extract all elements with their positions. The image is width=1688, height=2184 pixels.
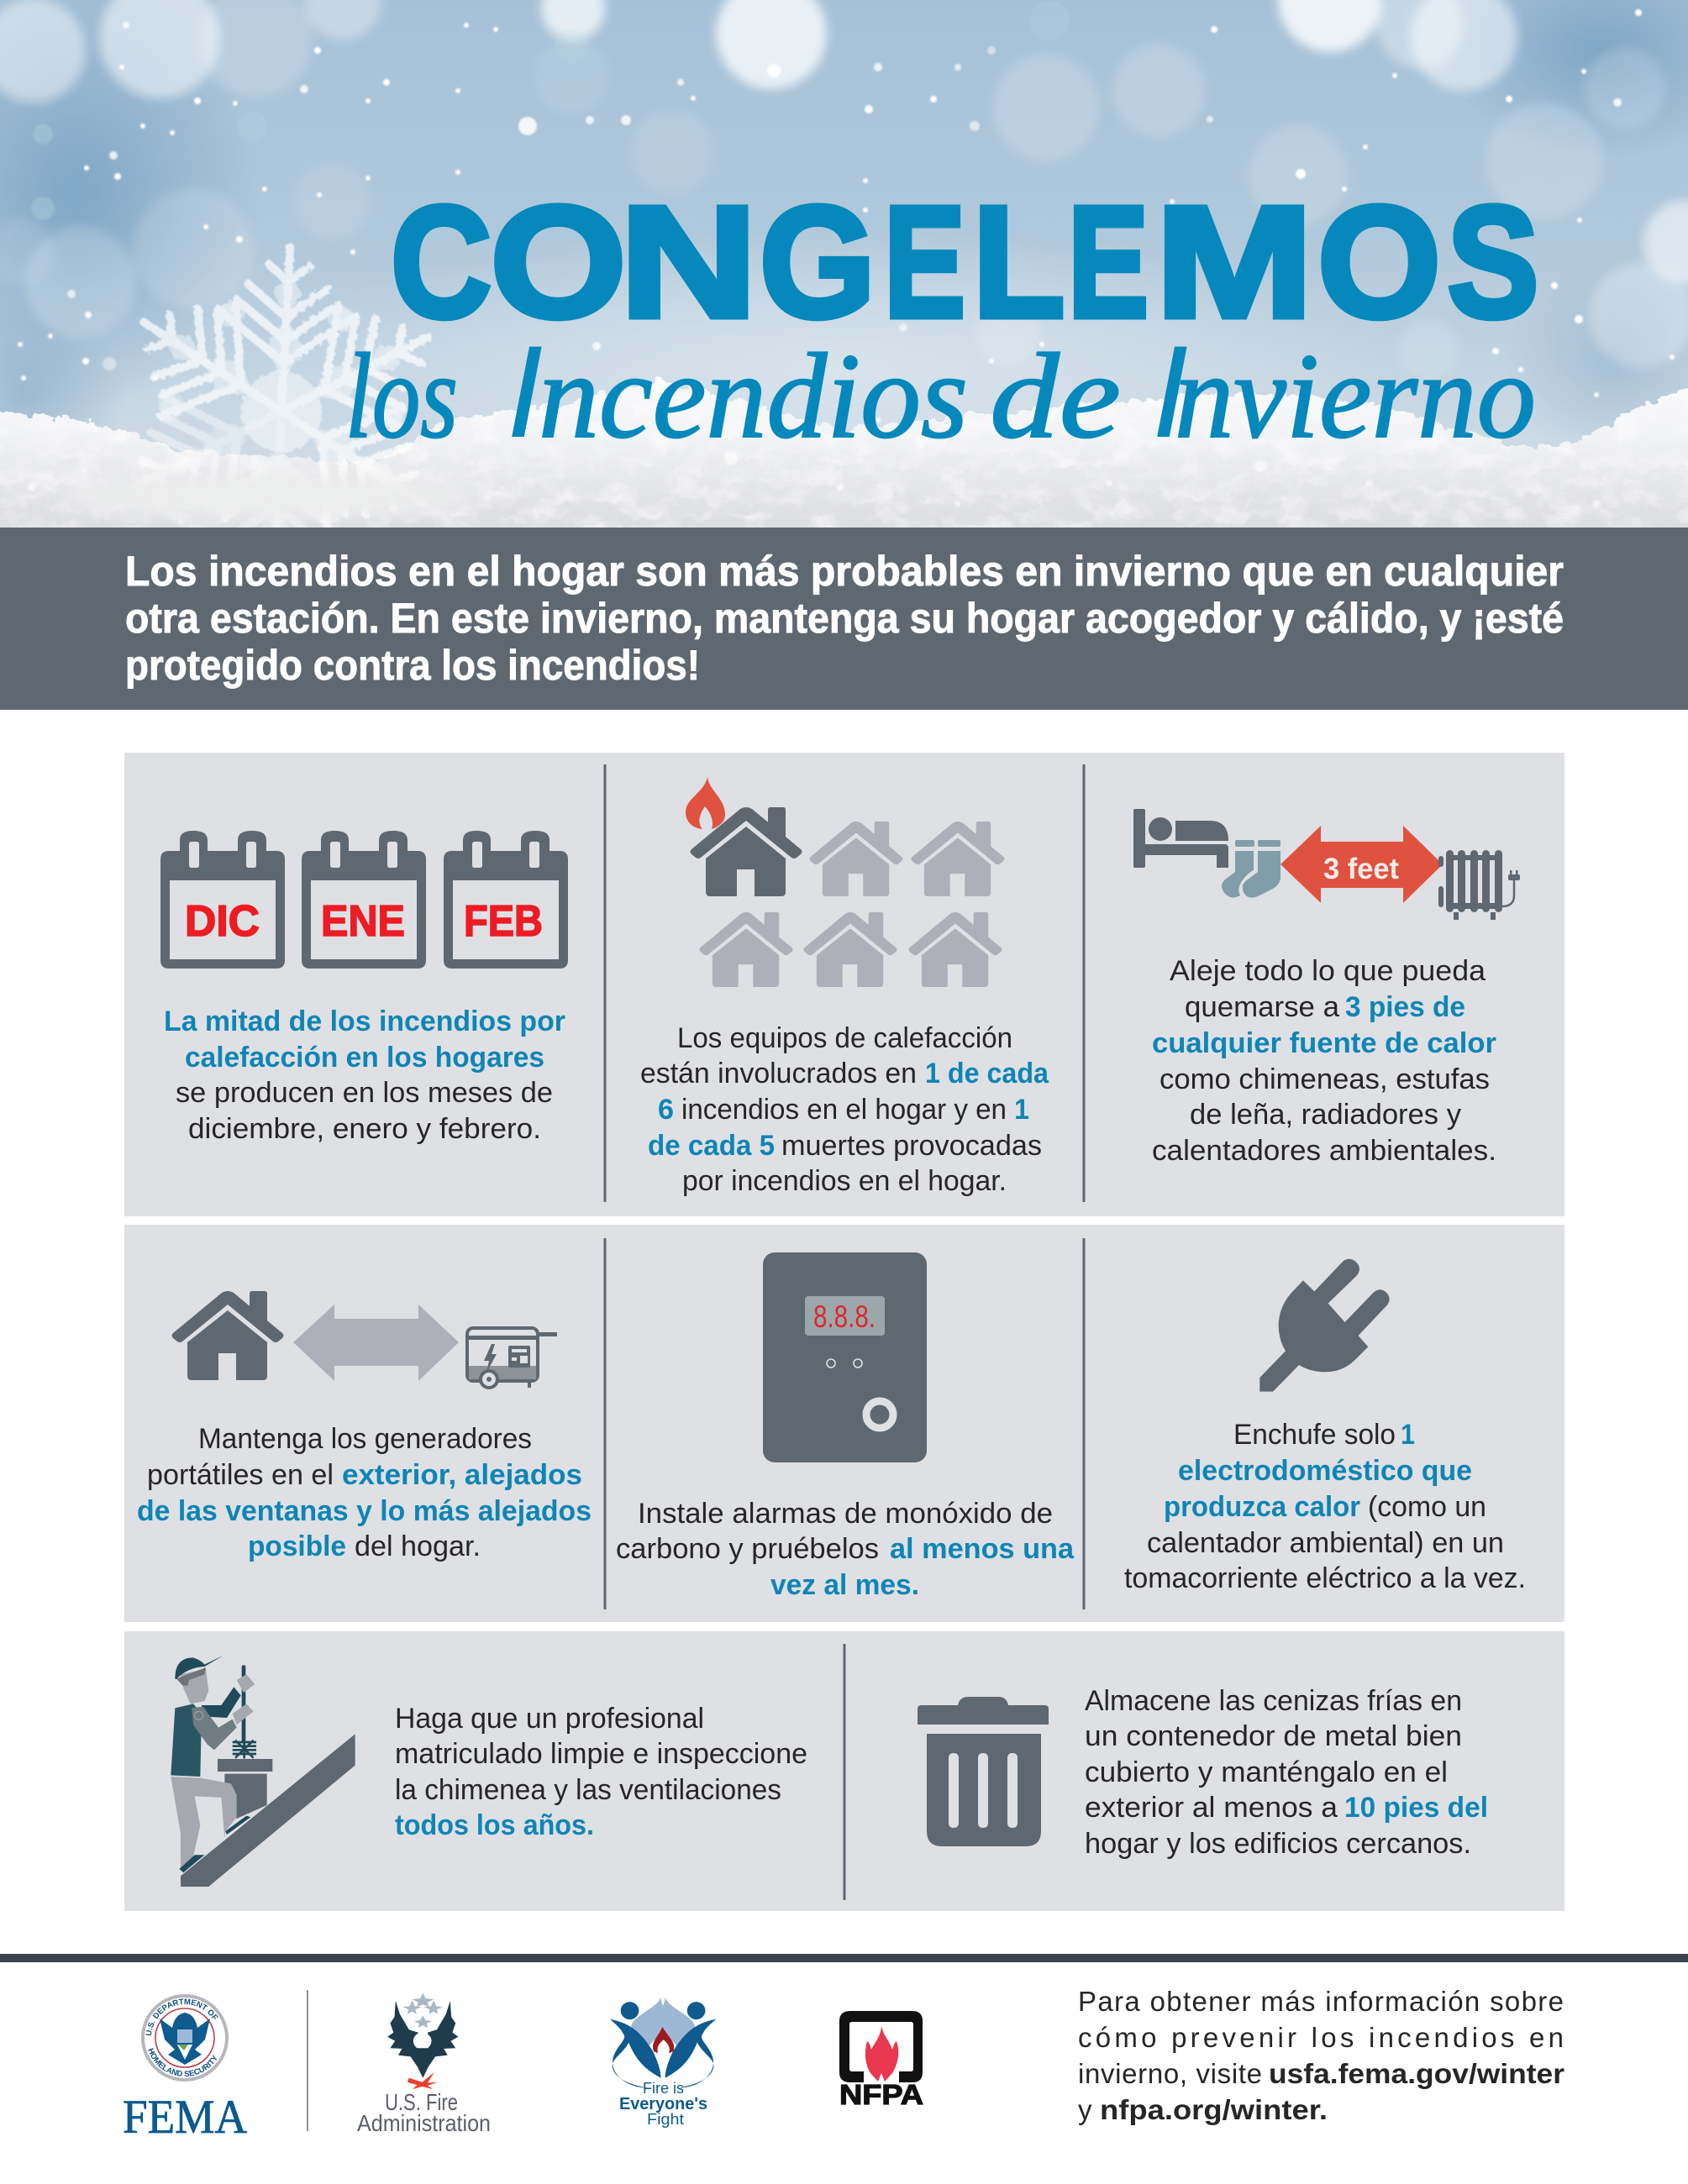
text: ash storage: hogar y los edificios cercanos. <box>1085 1828 1471 1860</box>
logo: Fire is Everyone's Fight <box>610 1997 716 2128</box>
text: CO alarms: carbono y pruébelos <box>616 1533 879 1565</box>
text: plug one heating appliance <box>1124 1419 1526 1594</box>
logo: FEMA and DHS seal: HOMELAND SECURITY <box>148 2048 217 2076</box>
title: C <box>391 174 492 351</box>
icon: chimney sweep on roof <box>171 1656 355 1887</box>
text: half of home heating fires: calefacción en los hogares <box>185 1042 544 1074</box>
text: plug one heating appliance: 1 <box>1401 1419 1415 1451</box>
title: E <box>884 174 965 351</box>
logo: FEMA and DHS seal <box>123 1994 247 2144</box>
intro band: otra estación. En este invierno, mantenga su hogar acogedor y cálido, y ¡esté <box>125 595 1564 642</box>
icon: snowflake <box>59 238 479 585</box>
text: heating equipment statistic: están involucrados en <box>640 1058 917 1089</box>
title: nvierno <box>1175 329 1536 464</box>
text: CO alarms <box>616 1498 1075 1601</box>
text: ash storage: un contenedor de metal bien <box>1085 1720 1462 1752</box>
title: O <box>1317 174 1441 351</box>
text: CO alarms: vez al mes. <box>770 1569 919 1601</box>
intro band: protegido contra los incendios! <box>125 642 700 689</box>
text: ash storage: Almacene las cenizas frías en <box>1085 1685 1462 1717</box>
text: 3 feet clearance <box>1152 955 1496 1167</box>
intro band <box>0 528 1688 710</box>
icon: house, arrow, generator <box>171 1291 557 1388</box>
title: I <box>507 319 543 465</box>
title: L <box>973 174 1065 351</box>
text: 3 feet clearance: Aleje todo lo que pueda <box>1170 955 1486 987</box>
text: heating equipment statistic: incendios en el hogar y en <box>681 1094 1007 1126</box>
text: CO alarms: al menos una <box>890 1533 1075 1565</box>
text: more information: Para obtener más información sobre <box>1078 1986 1564 2017</box>
panel: row 3 <box>124 1631 1564 1911</box>
text: more information: nfpa.org/winter. <box>1100 2094 1328 2125</box>
text: chimney inspection <box>395 1703 807 1841</box>
text: 3 feet clearance: 3 pies de <box>1345 991 1465 1023</box>
intro band: Los incendios en el hogar son más probables en invierno que en cualquier <box>125 548 1564 595</box>
footer logo divider <box>307 1990 308 2131</box>
text: heating equipment statistic: muertes provocadas <box>781 1130 1042 1162</box>
logo: U.S. Fire Administration: Administration <box>357 2110 491 2136</box>
title: S <box>1447 174 1539 351</box>
text: portable generators: de las ventanas y lo más alejados <box>137 1495 592 1527</box>
logo: NFPA: NFPA <box>839 2079 923 2110</box>
text: plug one heating appliance: (como un <box>1368 1491 1486 1523</box>
text: half of home heating fires: se producen en los meses de <box>176 1077 553 1109</box>
panel: row 2 <box>124 1225 1564 1622</box>
text: portable generators: posible <box>248 1530 346 1562</box>
text: ash storage: cubierto y manténgalo en el <box>1085 1756 1448 1788</box>
text: more information <box>1078 1986 1564 2125</box>
text: portable generators: del hogar. <box>355 1530 481 1562</box>
text: plug one heating appliance: electrodoméstico que <box>1178 1455 1472 1487</box>
text: 3 feet clearance: cualquier fuente de calor <box>1152 1027 1496 1059</box>
text: portable generators: exterior, alejados <box>342 1459 582 1491</box>
text: half of home heating fires: La mitad de los incendios por <box>164 1005 565 1037</box>
text: heating equipment statistic: 1 de cada <box>925 1058 1049 1089</box>
text: heating equipment statistic: Los equipos de calefacción <box>677 1022 1012 1054</box>
text: chimney inspection: todos los años. <box>395 1809 594 1841</box>
logo: U.S. Fire Administration <box>357 1992 491 2136</box>
text: plug one heating appliance: tomacorriente eléctrico a la vez. <box>1124 1562 1526 1594</box>
text: portable generators: portátiles en el <box>147 1459 334 1491</box>
title: M <box>1155 174 1313 351</box>
text: chimney inspection: la chimenea y las ventilaciones <box>395 1774 781 1806</box>
panel: row 1 <box>124 753 1564 1216</box>
text: heating equipment statistic: de cada 5 <box>648 1130 775 1162</box>
text: 3 feet clearance: quemarse a <box>1185 991 1339 1023</box>
icon: six houses, one on fire <box>686 777 1004 987</box>
text: more information: invierno, visite <box>1078 2058 1262 2089</box>
logo: Fire is Everyone's Fight: Everyone's <box>619 2095 707 2113</box>
title: los <box>345 329 458 464</box>
text: heating equipment statistic <box>640 1022 1049 1197</box>
hero background: winter sky with snow <box>0 0 1688 554</box>
text: heating equipment statistic: 6 <box>658 1094 674 1126</box>
icon: carbon monoxide alarm: 8.8.8. <box>813 1299 876 1334</box>
title: E <box>1068 174 1149 351</box>
text: chimney inspection: Haga que un profesional <box>395 1703 704 1735</box>
text: heating equipment statistic: por incendios en el hogar. <box>682 1165 1007 1197</box>
title: I <box>1152 319 1188 465</box>
text: half of home heating fires: diciembre, enero y febrero. <box>188 1113 541 1145</box>
text: CO alarms: Instale alarmas de monóxido de <box>638 1498 1053 1530</box>
text: ash storage: 10 pies del <box>1344 1792 1488 1824</box>
title: N <box>620 174 758 351</box>
text: portable generators <box>137 1423 592 1562</box>
icon: calendars DIC ENE FEB: FEB <box>464 897 543 946</box>
logo: Fire is Everyone's Fight: Fight <box>647 2111 684 2128</box>
icon: calendars DIC ENE FEB <box>160 831 568 969</box>
text: more information: usfa.fema.gov/winter <box>1269 2058 1564 2089</box>
text: heating equipment statistic: 1 <box>1014 1094 1029 1126</box>
title: G <box>760 174 876 351</box>
text: 3 feet clearance: de leña, radiadores y <box>1190 1099 1461 1131</box>
logo: NFPA <box>839 2011 923 2110</box>
logo: U.S. Fire Administration: U.S. Fire <box>385 2089 458 2115</box>
title: ncendios <box>539 329 968 464</box>
logo: FEMA and DHS seal: FEMA <box>123 2091 247 2144</box>
icon: carbon monoxide alarm <box>763 1252 927 1462</box>
text: more information: y <box>1078 2094 1092 2125</box>
logo: FEMA and DHS seal: U.S. DEPARTMENT OF <box>146 1998 218 2036</box>
logo: Fire is Everyone's Fight: Fire is <box>643 2080 684 2097</box>
icon: calendars DIC ENE FEB: DIC <box>185 897 260 946</box>
text: 3 feet clearance: calentadores ambientales. <box>1152 1135 1496 1167</box>
icon: trash can <box>918 1697 1049 1846</box>
icon: bed, socks, 3 feet arrow, radiator <box>1133 809 1520 920</box>
icon: electrical plug <box>1259 1259 1390 1392</box>
text: plug one heating appliance: produzca calor <box>1164 1491 1360 1523</box>
title: de <box>990 329 1121 464</box>
icon: bed, socks, 3 feet arrow, radiator: 3 feet <box>1323 853 1399 885</box>
text: portable generators: Mantenga los generadores <box>198 1423 532 1455</box>
text: 3 feet clearance: como chimeneas, estufas <box>1160 1063 1490 1095</box>
footer rule <box>0 1954 1688 1962</box>
text: plug one heating appliance: Enchufe solo <box>1233 1419 1396 1451</box>
text: plug one heating appliance: calentador ambiental) en un <box>1147 1527 1504 1559</box>
icon: calendars DIC ENE FEB: ENE <box>321 897 405 946</box>
text: ash storage: exterior al menos a <box>1085 1792 1338 1824</box>
title: O <box>491 174 627 351</box>
text: half of home heating fires <box>164 1005 565 1145</box>
text: ash storage <box>1085 1685 1488 1860</box>
title <box>345 174 1539 465</box>
text: more information: cómo prevenir los incendios en <box>1078 2022 1564 2053</box>
text: chimney inspection: matriculado limpie e inspeccione <box>395 1738 807 1770</box>
